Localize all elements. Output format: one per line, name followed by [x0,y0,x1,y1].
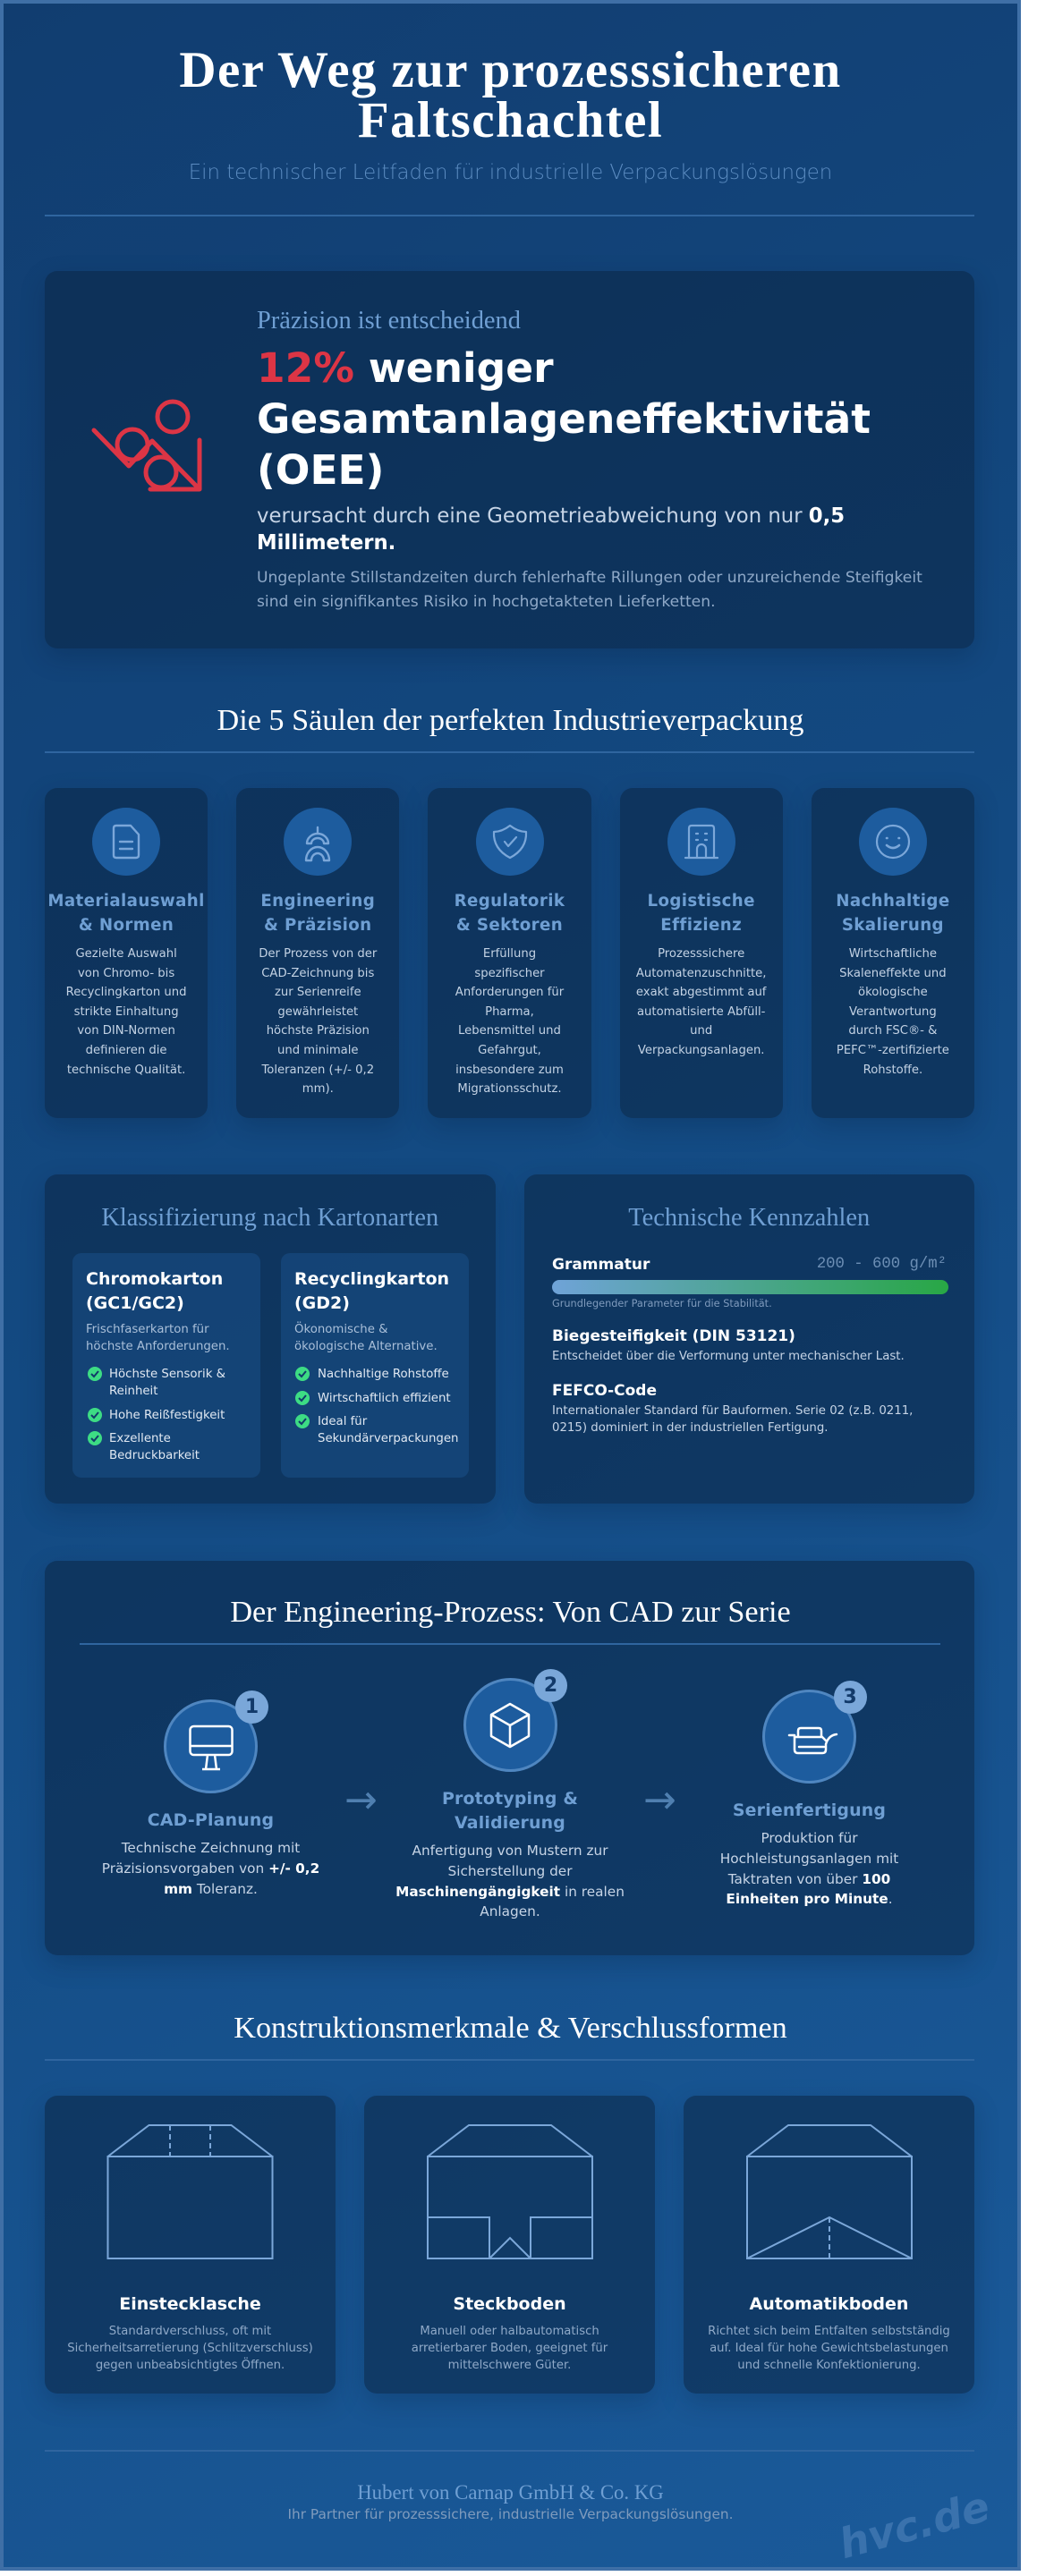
pillar 4 text [636,947,767,1057]
pillar 1 title [47,892,205,935]
step 1 title: CAD-Planung [148,1810,274,1830]
FEFCO label: FEFCO-Code [552,1382,657,1400]
Biegesteifigkeit text: Entscheidet über die Verformung unter mechanischer Last. [552,1350,905,1363]
pillar 2 text: CAD-Zeichnung bis [261,967,374,980]
pillar 3 text: Migrationsschutz. [457,1082,562,1096]
step 2 text: Anlagen. [480,1903,540,1919]
Recyclingkarton item 3: Sekundärverpackungen [318,1432,458,1445]
step 2 title: Validierung [455,1813,565,1833]
panel: pillar 3 [428,788,591,1118]
panel: pillar 1 [45,788,208,1118]
pillar 4 text: Automatenzuschnitte, [636,967,766,980]
pillar 1 text: strikte Einhaltung [74,1005,179,1019]
Recyclingkarton item 3: Ideal für [318,1415,367,1428]
pillar 2 title: Engineering [260,892,375,911]
FEFCO text: 0215) dominiert in der industriellen Fertigung. [552,1421,828,1435]
panel: Steckboden [364,2096,655,2394]
diagram: Automatikboden [746,2124,913,2259]
Grammatur bar [552,1280,948,1294]
pillar 1 title: Materialauswahl [47,892,205,911]
step 3 text: Produktion für [761,1830,858,1846]
Chromokarton list text [109,1368,225,1398]
title: Der Weg zur prozesssicheren [179,42,842,98]
pillar 1 text: Recyclingkarton und [66,986,187,999]
Chromokarton item 3: Exzellente [109,1432,171,1445]
step 1 badge [235,1690,268,1723]
Chromokarton item 3 [109,1432,200,1462]
Steckboden title: Steckboden [453,2294,566,2314]
pillar 1 text [66,947,187,1077]
step 2 text: Anfertigung von Mustern zur [412,1843,608,1859]
watermark: hvc.de [834,2482,995,2568]
Einstecklasche text [67,2325,313,2372]
step 3 text [720,1830,898,1907]
step 3 text: Taktraten von über 100 [728,1871,890,1887]
Automatikboden text: auf. Ideal für hohe Gewichtsbelastungen [710,2342,948,2355]
Einstecklasche title: Einstecklasche [119,2294,261,2314]
step 3 text: Hochleistungsanlagen mit [720,1851,898,1867]
Recyclingkarton title: Recyclingkarton [294,1269,449,1289]
pillar 2 text: Der Prozess von der [259,947,377,961]
Recyclingkarton description: ökologische Alternative. [294,1340,438,1353]
heading: construction features: Konstruktionsmerkmale & Verschlussformen [234,2012,787,2045]
pillar 2 text: gewährleistet [277,1005,358,1019]
step 2 text: Sicherstellung der [447,1863,573,1879]
pillar 3 text: Erfüllung [483,947,536,961]
panel: Automatikboden [684,2096,974,2394]
Grammatur label: Grammatur [552,1256,650,1274]
pillar 4 text: automatisierte Abfüll- [637,1005,765,1019]
icon: monitor [189,1724,234,1771]
pillar 4 title [647,892,755,935]
hero headline: Gesamtanlageneffektivität [257,395,871,443]
pillar 3 title: Regulatorik [455,892,565,911]
pillar 5 text: Skaleneffekte und [839,967,947,980]
pillar 3 text: Lebensmittel und [458,1024,561,1038]
pillar 1 text: von Chromo- bis [78,967,174,980]
icon: production pot [787,1726,837,1755]
footer company: Hubert von Carnap GmbH & Co. KG [357,2481,664,2504]
step 1 text [102,1840,319,1897]
technical heading: Technische Kennzahlen [628,1204,870,1232]
step 1 badge: 1 [245,1696,259,1717]
pillar 1 text: technische Qualität. [67,1063,185,1077]
Recyclingkarton checklist [295,1367,310,1428]
icon: smiley [859,808,927,876]
Automatikboden text [708,2325,950,2372]
hero note [257,569,922,611]
Automatikboden text: Richtet sich beim Entfalten selbstständig [708,2325,950,2338]
pillar 4 text: Verpackungsanlagen. [638,1044,765,1057]
icon: shield [476,808,544,876]
Automatikboden text: und schnelle Konfektionierung. [737,2359,921,2372]
hero note: sind ein signifikantes Risiko in hochgetakteten Lieferketten. [257,593,716,611]
icon: building [667,808,735,876]
Chromokarton checklist [88,1367,102,1445]
icon: engineering arcs [284,808,352,876]
hero headline: (OEE) [257,446,384,494]
pillar 3 text: spezifischer [474,967,545,980]
Grammatur value: 200 - 600 g/m² [817,1256,947,1273]
diagram: Steckboden [427,2124,593,2259]
sub-card: Recyclingkarton [281,1253,469,1478]
heading: 5 pillars: Die 5 Säulen der perfekten Industrieverpackung [217,704,803,737]
Recyclingkarton item 3 [318,1415,458,1445]
pillar 2 text: zur Serienreife [275,986,361,999]
Chromokarton title [86,1269,223,1313]
Grammatur caption: Grundlegender Parameter für die Stabilität. [552,1298,772,1309]
pillar 2 title: & Präzision [264,916,372,935]
step 2 title: Prototyping & [442,1789,578,1809]
Recyclingkarton title [294,1269,449,1313]
Recyclingkarton description [294,1322,438,1353]
panel: pillar 5 [812,788,974,1118]
Recyclingkarton title: (GD2) [294,1293,350,1313]
step 3 circle [762,1690,856,1784]
Einstecklasche text: gegen unbeabsichtigtes Öffnen. [96,2359,285,2372]
Einstecklasche text: Standardverschluss, oft mit [109,2325,271,2338]
step 2 text [395,1843,625,1919]
step 1 text: Präzisionsvorgaben von +/- 0,2 [102,1860,319,1877]
pillar 5 title: Nachhaltige [836,892,950,911]
pillar 5 text: Rohstoffe. [863,1063,922,1077]
Chromokarton item 2: Hohe Reißfestigkeit [109,1409,225,1422]
panel: Einstecklasche [45,2096,336,2394]
pillar 3 text: insbesondere zum [455,1063,564,1077]
step 2 circle [463,1678,557,1772]
panel: technical figures [524,1174,974,1504]
pillar 5 text: ökologische [858,986,928,999]
pillar 5 text: durch FSC®- & [848,1024,937,1038]
panel: pillar 4 [620,788,783,1118]
process heading: Der Engineering-Prozess: Von CAD zur Serie [230,1596,791,1629]
pillar 4 title: Effizienz [660,916,742,935]
pillar 4 text: und [690,1024,712,1038]
Chromokarton description [86,1323,230,1353]
Biegesteifigkeit label: Biegesteifigkeit (DIN 53121) [552,1327,795,1345]
pillar 5 title [836,892,950,935]
hero headline [257,344,871,494]
pillar 5 text [837,947,949,1077]
pillar 1 text: definieren die [86,1044,167,1057]
pillar 2 text: Toleranzen (+/- 0,2 [261,1063,374,1077]
arrow 1: → [344,1777,378,1823]
Steckboden text: Manuell oder halbautomatisch [420,2325,599,2338]
Chromokarton description: höchste Anforderungen. [86,1340,230,1353]
panel: pillar 2 [236,788,399,1118]
hero subline: Millimetern. [257,531,395,555]
pillar 4 text: exakt abgestimmt auf [636,986,766,999]
step 3 badge: 3 [843,1685,857,1708]
panel: hero statistic [45,271,974,648]
pillar 4 title: Logistische [647,892,755,911]
icon: document [92,808,160,876]
Chromokarton description: Frischfaserkarton für [86,1323,209,1336]
hero headline: 12% weniger [257,344,554,392]
Einstecklasche text: Sicherheitsarretierung (Schlitzverschluss) [67,2342,313,2355]
hero note: Ungeplante Stillstandzeiten durch fehlerhafte Rillungen oder unzureichende Steifigkeit [257,569,922,587]
Recyclingkarton description: Ökonomische & [294,1323,387,1336]
pillar 3 text [455,947,564,1096]
pillar 1 title: & Normen [79,916,174,935]
arrow 2: → [643,1777,676,1823]
pillar 5 text: Verantwortung [849,1005,937,1019]
footer tagline: Ihr Partner für prozesssichere, industrielle Verpackungslösungen. [288,2506,733,2522]
pillar 3 title: & Sektoren [456,916,563,935]
pillar 2 text: und minimale [277,1044,359,1057]
FEFCO text [552,1404,913,1435]
Steckboden text: mittelschwere Güter. [448,2359,571,2372]
Recyclingkarton item 1: Nachhaltige Rohstoffe [318,1368,449,1381]
panel: carton classification [45,1174,496,1504]
pillar 3 text: Pharma, [485,1005,534,1019]
diagram: Einstecklasche [107,2124,274,2259]
panel: engineering process [45,1561,974,1955]
hero subline [257,504,845,555]
step 1 circle [164,1699,258,1793]
title [179,42,842,148]
Chromokarton item 3: Bedruckbarkeit [109,1449,200,1462]
icon: red geometry warning [91,399,202,492]
pillar 5 text: Wirtschaftliche [849,947,937,961]
FEFCO text: Internationaler Standard für Bauformen. Serie 02 (z.B. 0211, [552,1404,913,1418]
classification heading: Klassifizierung nach Kartonarten [101,1204,438,1232]
step 3 title: Serienfertigung [733,1801,886,1820]
step 2 badge: 2 [544,1674,557,1696]
Steckboden text [412,2325,608,2372]
pillar 1 text: Gezielte Auswahl [75,947,177,961]
step 2 title [442,1789,578,1833]
title: Faltschachtel [358,92,663,148]
step 3 badge [834,1680,866,1714]
step 3 text: Einheiten pro Minute. [726,1891,893,1907]
pillar 3 text: Gefahrgut, [478,1044,541,1057]
sub-card: Chromokarton [72,1253,259,1478]
pillar 2 text: höchste Präzision [267,1024,370,1038]
pillar 3 title [455,892,565,935]
pillar 5 title: Skalierung [842,916,944,935]
pillar 3 text: Anforderungen für [455,986,564,999]
icon: cube [490,1703,530,1748]
pillar 2 title [260,892,375,935]
step 1 text: Technische Zeichnung mit [122,1840,300,1856]
Chromokarton list text: Höchste Sensorik & [109,1368,225,1381]
Automatikboden title: Automatikboden [750,2294,908,2314]
pillar 5 text: PEFC™-zertifizierte [837,1044,949,1057]
Steckboden text: arretierbarer Boden, geeignet für [412,2342,608,2355]
Chromokarton title: (GC1/GC2) [86,1293,184,1313]
step 2 badge [534,1669,567,1701]
step 2 text: Maschinengängigkeit in realen [395,1884,625,1900]
pillar 2 text [259,947,378,1096]
Chromokarton title: Chromokarton [86,1269,223,1289]
pillar 1 text: von DIN-Normen [77,1024,175,1038]
Chromokarton list text: Reinheit [109,1385,157,1398]
step 1 text: mm Toleranz. [164,1881,258,1897]
Recyclingkarton item 2: Wirtschaftlich effizient [318,1392,451,1405]
hero subline: verursacht durch eine Geometrieabweichung von nur 0,5 [257,504,845,528]
pillar 2 text: mm). [302,1082,334,1096]
subtitle: Ein technischer Leitfaden für industrielle Verpackungslösungen [189,161,832,184]
hero eyebrow: Präzision ist entscheidend [257,307,521,335]
pillar 4 text: Prozesssichere [658,947,744,961]
